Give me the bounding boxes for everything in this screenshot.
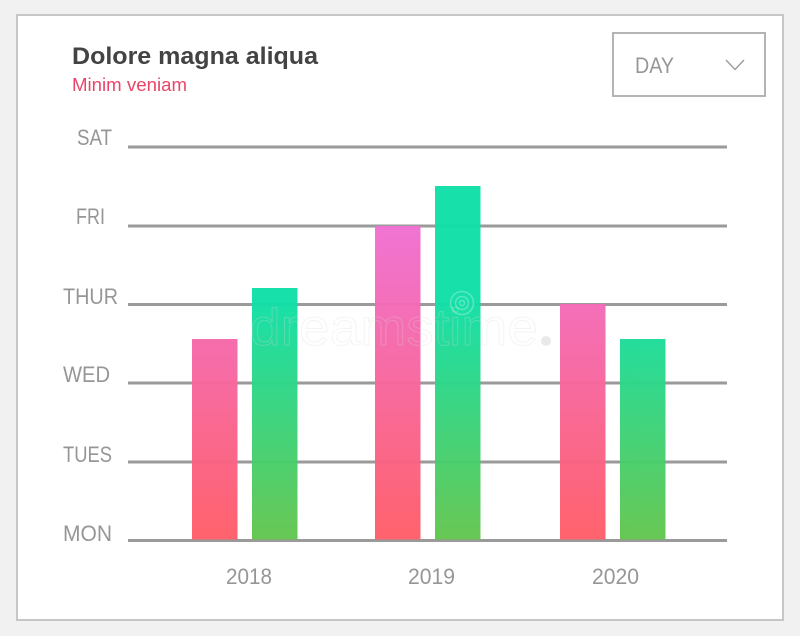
dropdown: [613, 33, 765, 96]
subtitle: Minim veniam: [72, 75, 187, 95]
bar: 2020 green: [620, 339, 666, 540]
grid lines: [128, 147, 727, 540]
bar: 2020 pink: [560, 304, 606, 540]
bar: 2018 green: [252, 288, 298, 540]
icon: chevron: [726, 60, 744, 70]
x axis labels: [226, 564, 639, 589]
bar chart: [192, 186, 666, 540]
title: Dolore magna aliqua: [72, 43, 318, 70]
y axis labels: THUR: [63, 284, 118, 309]
y axis labels: FRI: [76, 204, 105, 229]
watermark: dreamstime: [250, 299, 538, 357]
bar: 2018 pink: [192, 339, 238, 540]
y axis labels: SAT: [77, 125, 112, 150]
y axis labels: MON: [63, 521, 112, 546]
x axis labels: 2019: [408, 564, 455, 589]
x axis labels: 2018: [226, 564, 272, 589]
y axis labels: [63, 125, 118, 546]
watermark dot: [541, 336, 551, 346]
y axis labels: WED: [63, 362, 110, 387]
bar: 2019 green: [435, 186, 480, 540]
y axis labels: TUES: [63, 442, 112, 467]
dropdown: DAY: [635, 53, 674, 78]
icon: watermark spiral: [450, 292, 474, 314]
x axis labels: 2020: [592, 564, 639, 589]
bar: 2019 pink: [375, 226, 420, 540]
